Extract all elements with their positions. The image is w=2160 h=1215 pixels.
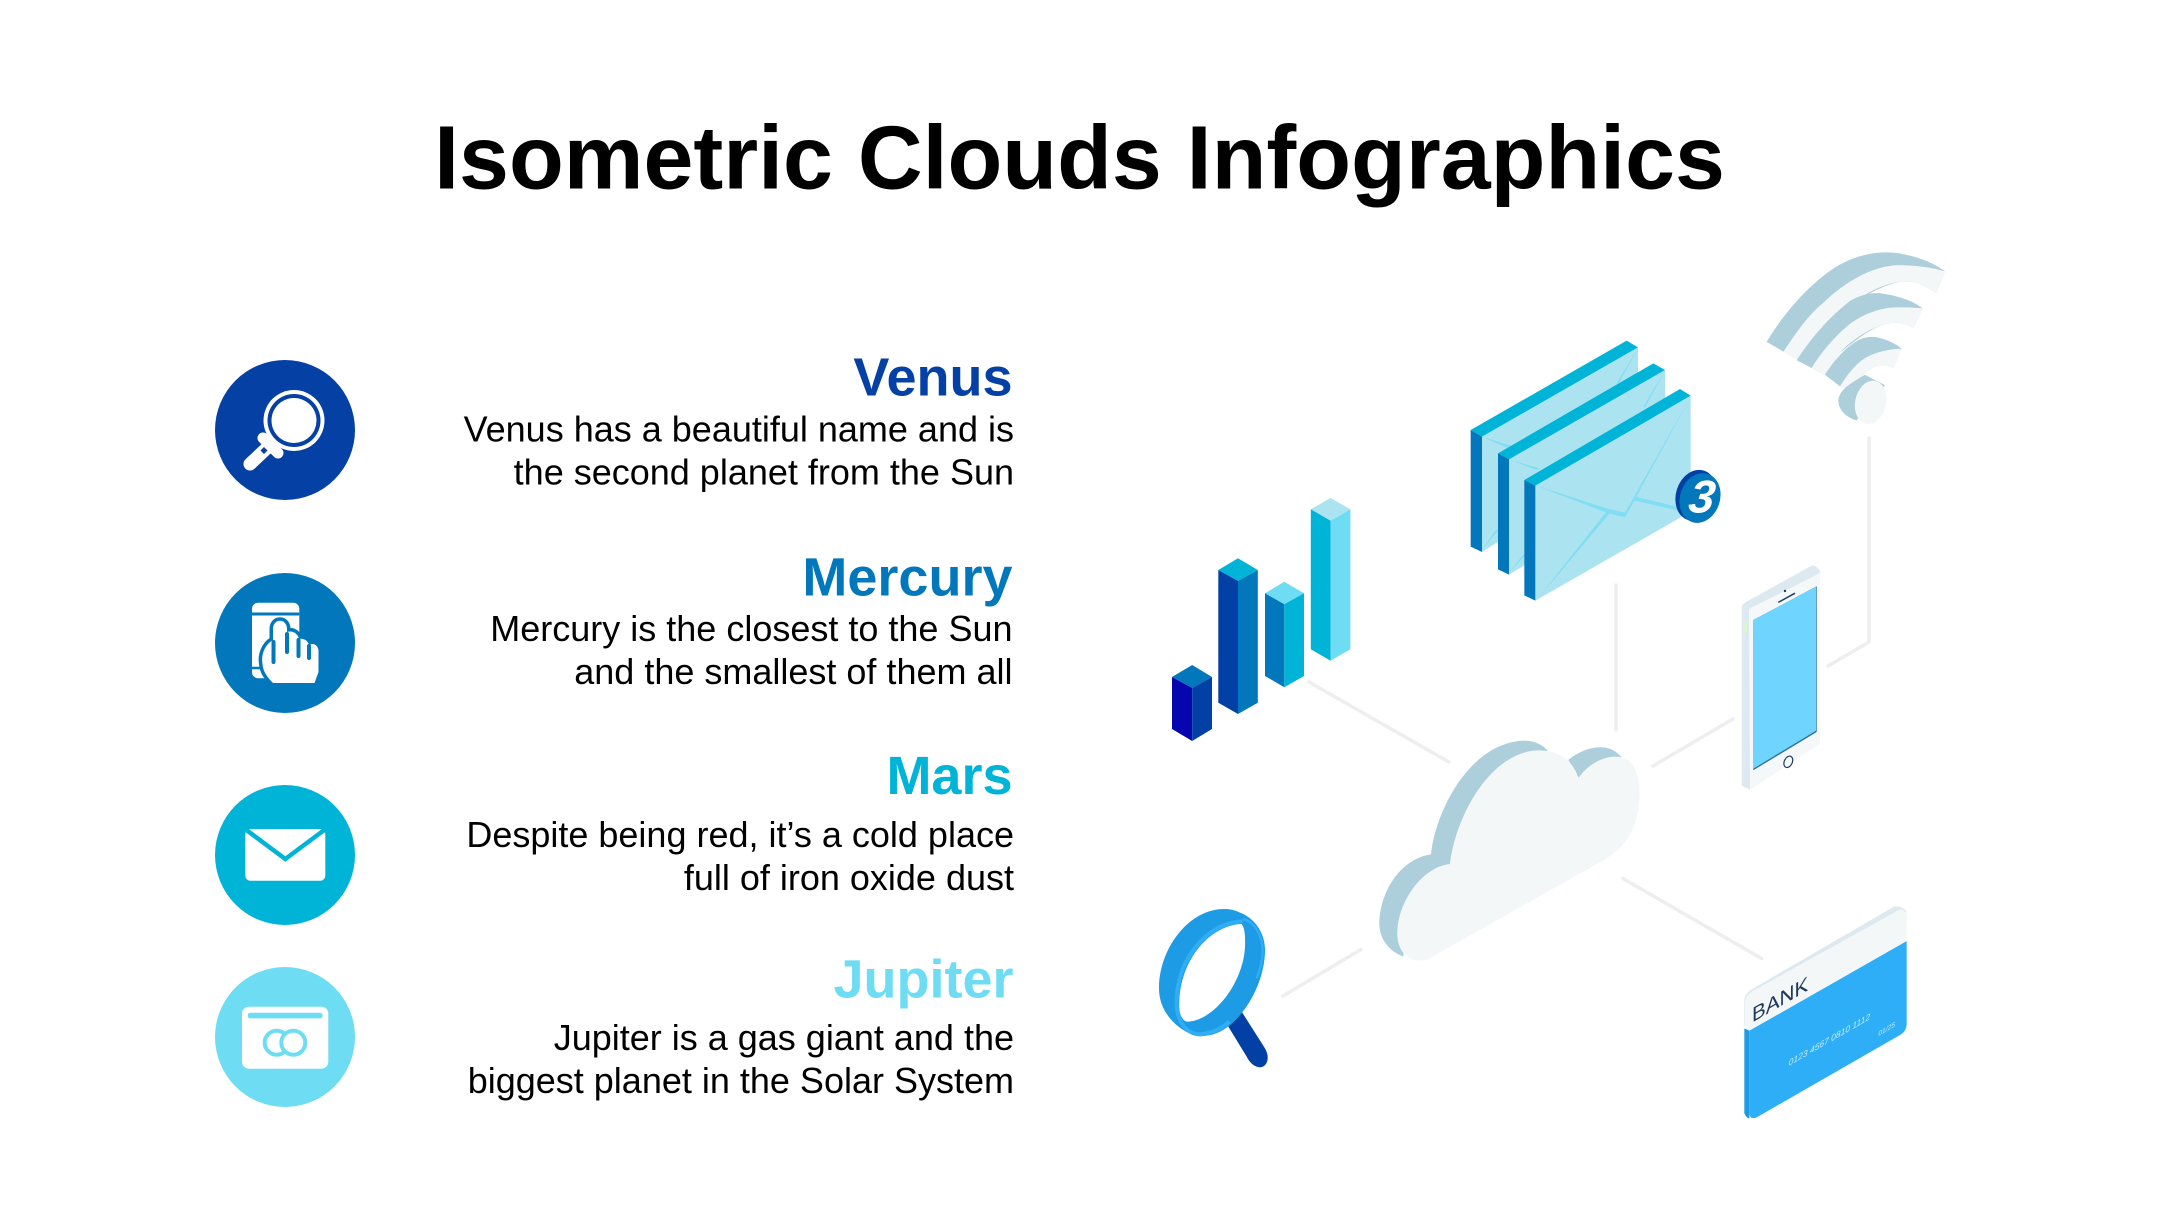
panel: Venus row bbox=[215, 348, 1014, 500]
panel: Jupiter row bbox=[215, 950, 1014, 1107]
text: Mercury description: Mercury is the closest to the Sun bbox=[490, 608, 1012, 649]
panel: Mars row bbox=[215, 746, 1014, 925]
envelope back bbox=[1471, 341, 1638, 552]
icon: magnifier in dark blue circle bbox=[215, 360, 355, 500]
text: Venus description: Venus has a beautiful name and is bbox=[464, 408, 1014, 450]
text: BANK: BANK bbox=[1752, 972, 1808, 1027]
badge: 3: 3 bbox=[1686, 471, 1719, 523]
icon: phone touch in blue circle bbox=[215, 573, 355, 713]
icon: smartphone bbox=[1742, 566, 1820, 789]
text: Mars description: Despite being red, it’s a cold place bbox=[466, 814, 1014, 855]
title: Isometric Clouds Infographics bbox=[434, 108, 1725, 208]
text: card expiry: 01/25 bbox=[1878, 1019, 1896, 1038]
text: card number: 0123 4567 0810 1112 bbox=[1789, 1012, 1870, 1068]
icon: envelope in cyan circle bbox=[215, 785, 355, 925]
icon: stacked envelopes with badge bbox=[1471, 341, 1727, 601]
bar 1 bbox=[1172, 665, 1212, 741]
heading: Mercury: Mercury bbox=[802, 548, 1012, 608]
heading: Mars: Mars bbox=[886, 746, 1012, 806]
text: Mercury description: and the smallest of them all bbox=[574, 651, 1012, 692]
connector lines bbox=[1283, 438, 1869, 996]
icon: bank card in light blue circle bbox=[215, 967, 355, 1107]
icon: magnifying glass bbox=[1159, 909, 1268, 1067]
icon: isometric bar chart bbox=[1172, 498, 1350, 741]
panel: Mercury row bbox=[215, 548, 1012, 713]
icon: bank card bbox=[1744, 906, 1907, 1118]
text: Jupiter description: Jupiter is a gas giant and the bbox=[554, 1017, 1014, 1058]
icon: central cloud bbox=[1379, 741, 1640, 961]
badge: 3 bbox=[1669, 464, 1727, 528]
bar 3 bbox=[1265, 582, 1304, 687]
envelope middle bbox=[1498, 363, 1665, 575]
icon: wifi signal bbox=[1767, 252, 1945, 429]
bar 4 bbox=[1311, 498, 1350, 661]
bar 2 bbox=[1218, 558, 1258, 714]
envelope front bbox=[1524, 389, 1691, 601]
heading: Jupiter: Jupiter bbox=[833, 950, 1014, 1010]
text: Mars description: full of iron oxide dust bbox=[684, 857, 1014, 898]
heading: Venus: Venus bbox=[853, 348, 1012, 408]
text: Jupiter description: biggest planet in the Solar System bbox=[468, 1060, 1014, 1101]
text: Venus description: the second planet from the Sun bbox=[514, 452, 1014, 492]
